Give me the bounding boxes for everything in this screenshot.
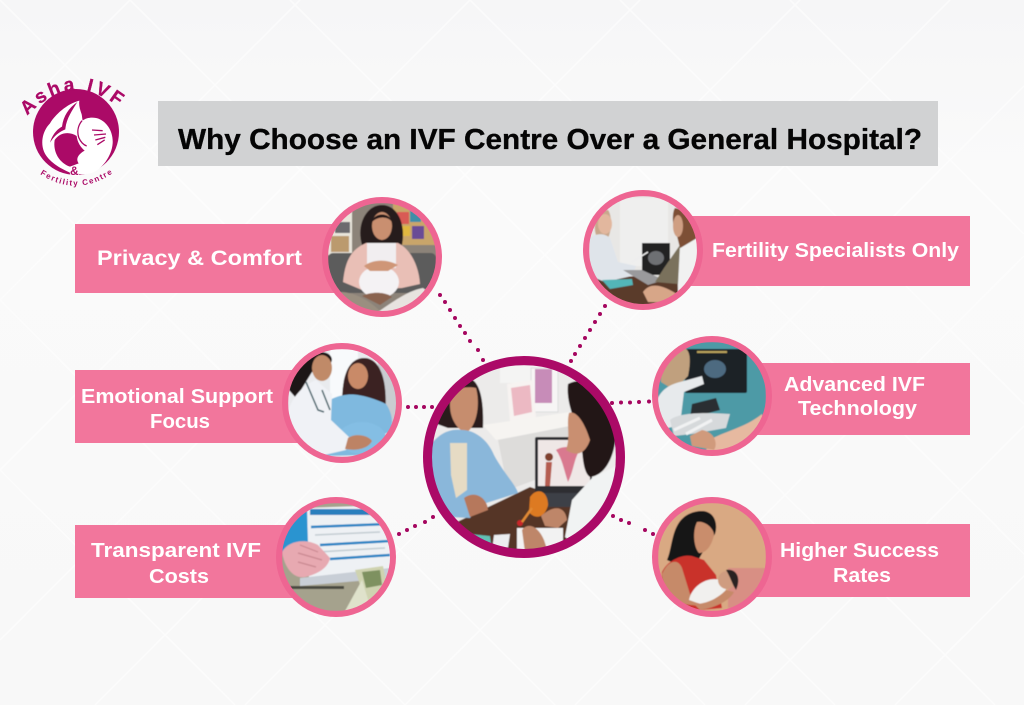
connector: privacy to centre <box>438 293 485 362</box>
title banner <box>158 101 938 166</box>
label: Advanced IVF <box>784 373 925 396</box>
label: Higher Success <box>780 539 939 562</box>
panel: Transparent IVF Costs <box>75 497 396 617</box>
photo: insurance form and cash <box>276 497 396 617</box>
logo name: Asha IVF <box>22 78 126 116</box>
connector: specialists to centre <box>569 304 607 363</box>
label: Emotional Support <box>81 385 273 408</box>
panel: Privacy & Comfort <box>75 197 442 320</box>
panel: Higher Success Rates <box>652 497 970 617</box>
label: Focus <box>150 410 210 433</box>
label: Technology <box>798 397 918 420</box>
label: Rates <box>833 564 891 587</box>
label <box>81 385 273 433</box>
logo tagline: Fertility Centre <box>40 170 112 188</box>
photo: doctor with pregnant patient <box>282 343 402 463</box>
connector: success to centre <box>611 514 655 536</box>
photo: pregnant woman on sofa <box>322 197 442 320</box>
label <box>780 539 939 587</box>
panel: Fertility Specialists Only <box>583 190 970 310</box>
central photo: consultation with uterus model <box>423 356 625 558</box>
panel: Advanced IVF Technology <box>652 336 970 456</box>
label: Privacy & Comfort <box>97 247 302 270</box>
label: Costs <box>149 565 209 588</box>
ampersand: & <box>70 164 79 178</box>
label <box>784 373 925 420</box>
label: Transparent IVF <box>91 539 261 562</box>
label: Fertility Specialists Only <box>712 239 960 262</box>
photo: mother holding newborn <box>652 497 772 617</box>
label <box>91 539 261 588</box>
icon: mother and baby silhouette <box>42 101 113 174</box>
title: Why Choose an IVF Centre Over a General Hospital? <box>178 124 922 156</box>
connector: emotional support to centre <box>406 405 434 409</box>
logo: Asha IVF Fertility Centre <box>22 78 126 188</box>
dotted connectors <box>397 293 655 536</box>
panel: Emotional Support Focus <box>75 343 402 463</box>
connector: technology to centre <box>610 400 651 405</box>
connector: costs to centre <box>397 515 435 536</box>
photo: doctor reviewing ultrasound on laptop <box>583 190 703 310</box>
photo: ultrasound machine <box>652 336 772 456</box>
